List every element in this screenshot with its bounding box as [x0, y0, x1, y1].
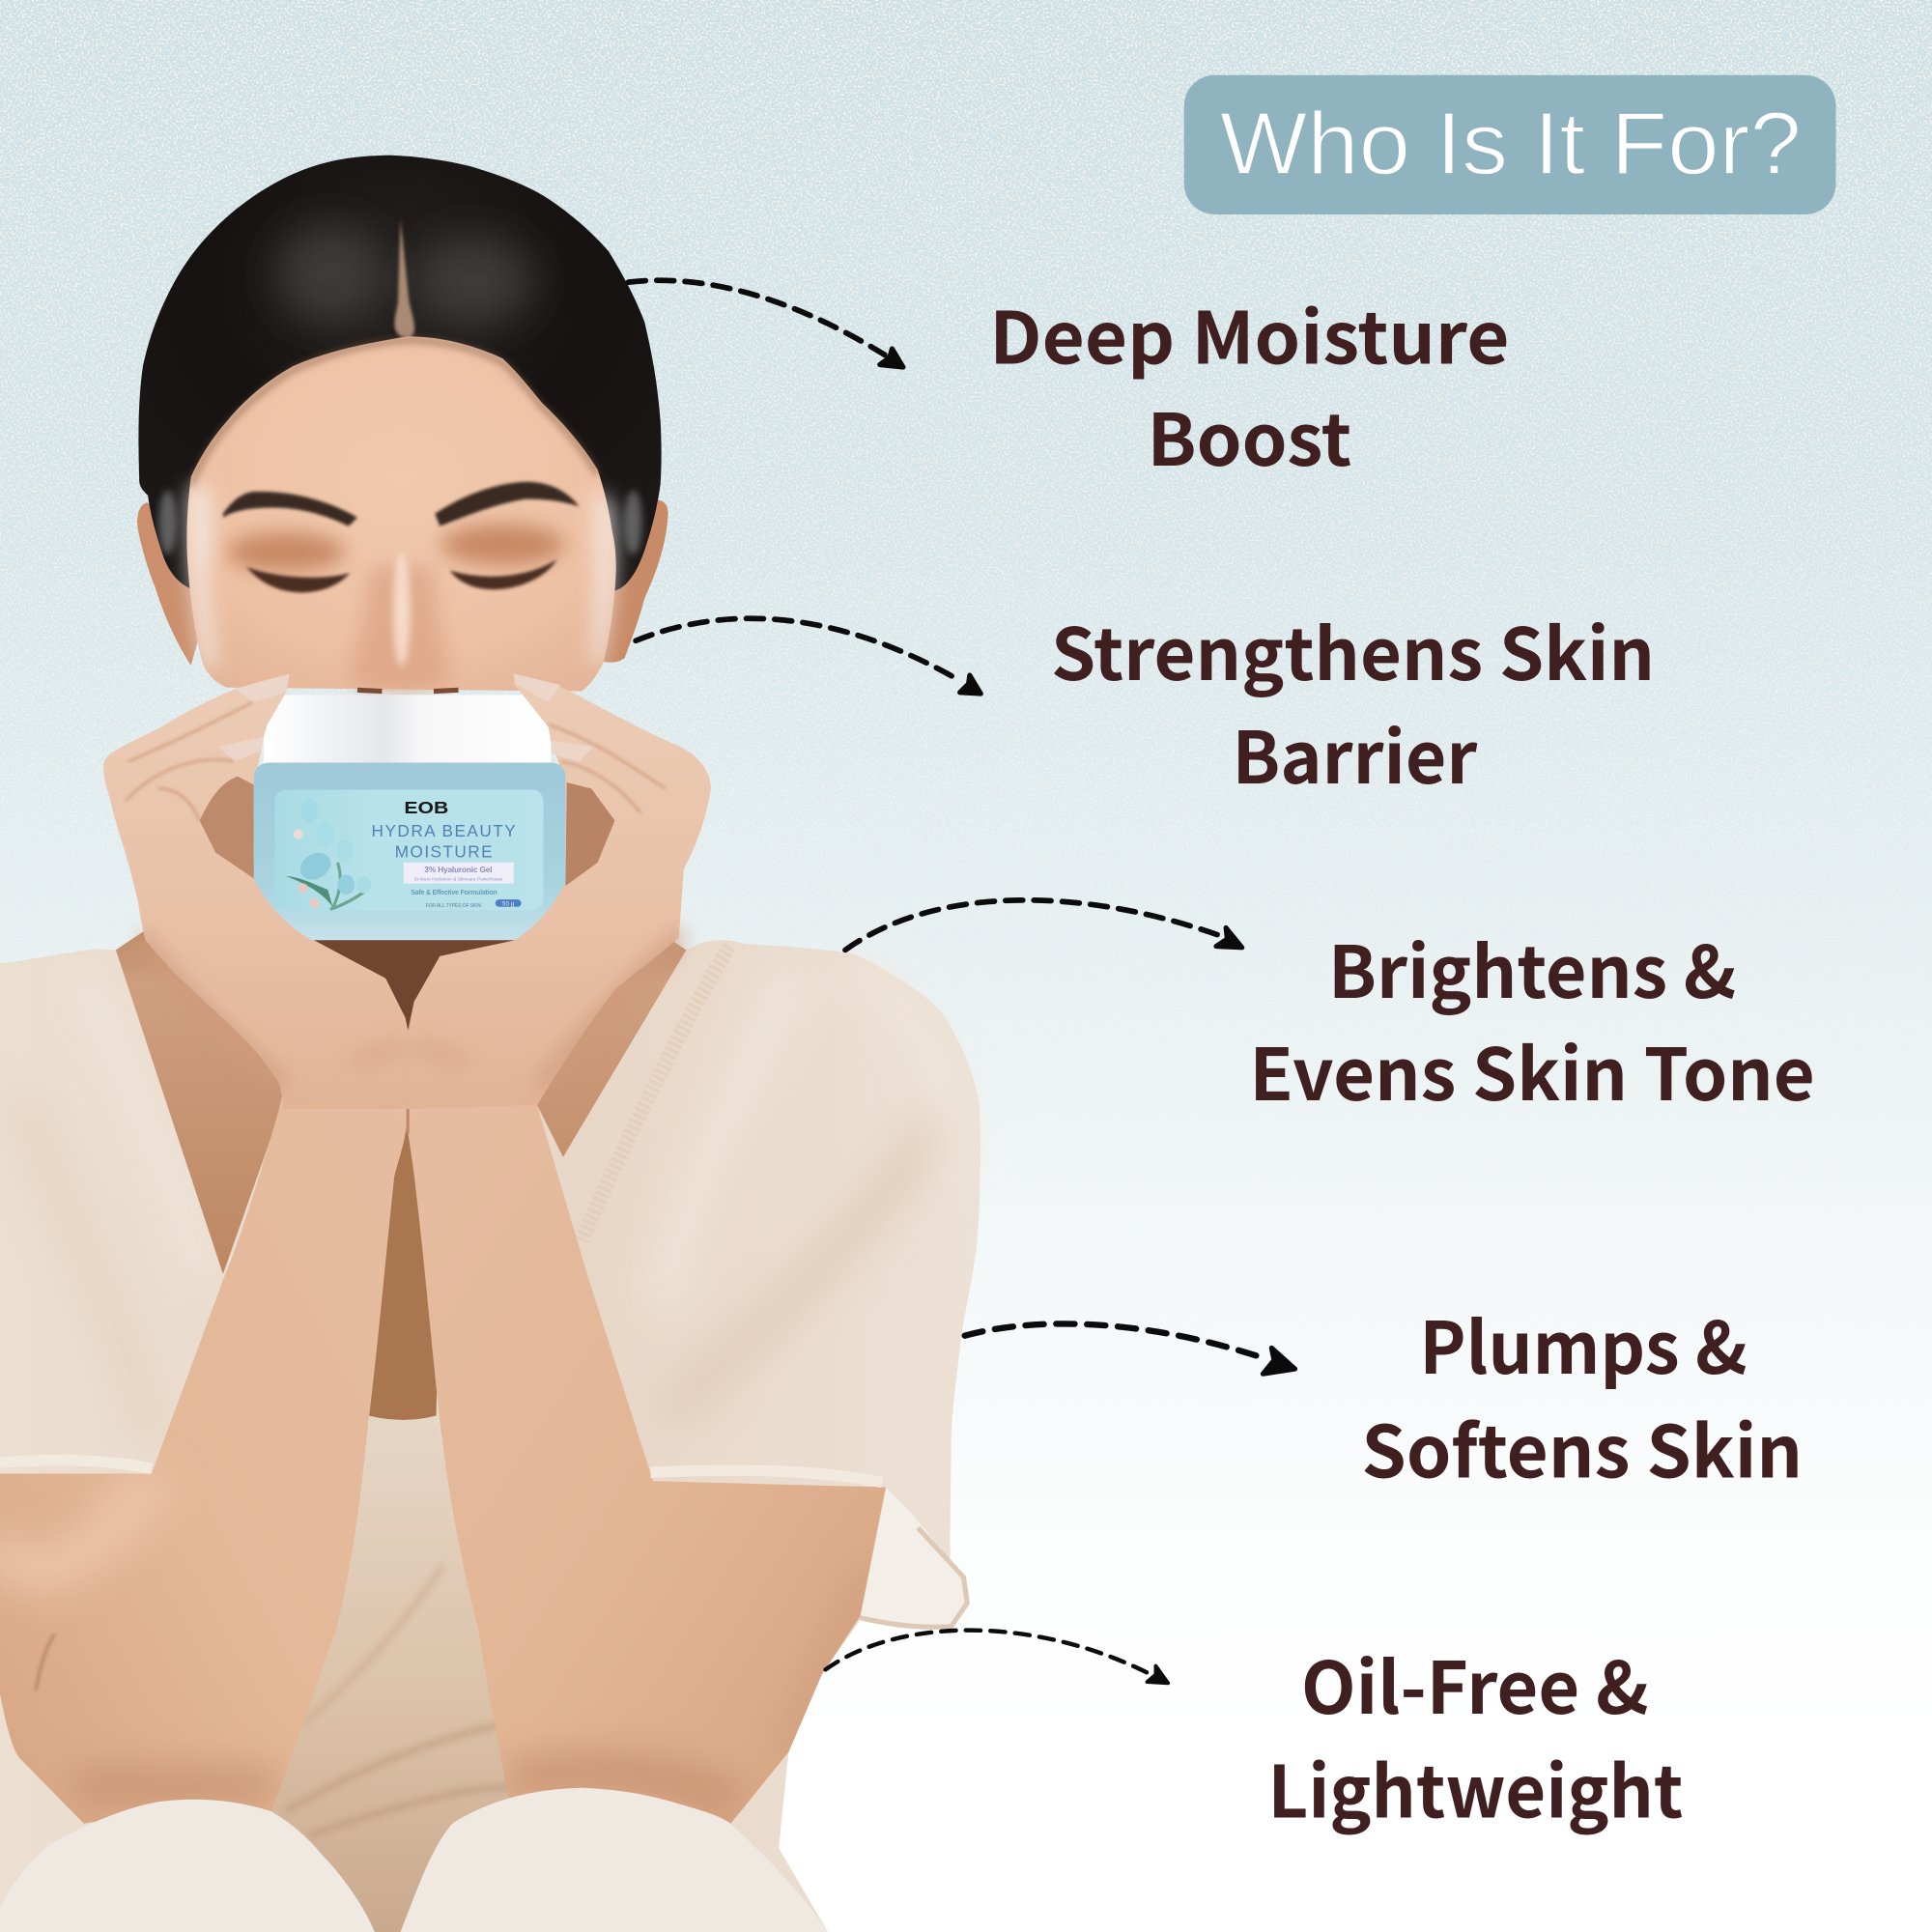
face	[186, 336, 616, 692]
benefit: even skin tone: Brightens &	[1328, 916, 1736, 1019]
nostril shadow	[357, 690, 458, 692]
sleeve folds	[25, 974, 955, 1430]
benefit: deep moisture	[989, 281, 1509, 487]
right sleeve hem	[650, 1470, 882, 1482]
title badge	[1184, 75, 1836, 214]
benefit: oil-free: Oil-Free &	[1301, 1632, 1649, 1735]
left eyebrow	[223, 492, 357, 526]
jar label	[274, 790, 543, 911]
cleavage shadow	[368, 1084, 443, 1420]
jar body	[254, 763, 565, 940]
person with product	[0, 156, 980, 1932]
benefit: plumps skin: Softens Skin	[1361, 1395, 1803, 1498]
skin type line: FOR ALL TYPES OF SKIN	[426, 903, 481, 909]
benefit: deep moisture: Boost	[1148, 384, 1351, 487]
arrow 4	[965, 1323, 1295, 1374]
benefit: plumps skin	[1361, 1292, 1803, 1498]
left sleeve hem	[0, 1461, 152, 1468]
benefit: oil-free	[1267, 1632, 1683, 1838]
product name: HYDRA BEAUTY	[372, 821, 516, 840]
claim box: 3% Hyaluronic Gel	[424, 865, 493, 874]
benefit: deep moisture: Deep Moisture	[989, 281, 1509, 384]
nose shading	[349, 567, 451, 693]
flutter hem	[860, 1528, 967, 1627]
face details	[223, 482, 579, 693]
benefit: skin barrier: Strengthens Skin	[1051, 598, 1655, 701]
benefit: skin barrier	[1051, 598, 1655, 805]
product name line 2: MOISTURE	[395, 842, 493, 862]
under-jar shadow	[312, 939, 515, 1030]
right hand	[409, 674, 711, 1109]
hair	[138, 156, 662, 591]
right eye	[450, 559, 557, 589]
right arm	[408, 1084, 886, 1830]
benefit: oil-free: Lightweight	[1267, 1735, 1683, 1838]
lower torso	[259, 1416, 567, 1932]
weight pill: 50 g	[502, 900, 515, 907]
title badge: Who Is It For?	[1220, 95, 1802, 193]
flower artwork	[286, 799, 371, 909]
hair sheen	[159, 224, 642, 554]
right eye shadow	[441, 524, 564, 565]
sleeve flutter	[860, 1488, 967, 1627]
wrist seam	[407, 1030, 409, 1133]
hand shading	[146, 938, 679, 1084]
fingernails	[219, 674, 594, 761]
left arm	[0, 1084, 408, 1824]
arrow 1	[629, 280, 903, 367]
claim box: 3x More Hydration & Skincare Powerhouse	[414, 876, 503, 881]
benefit: plumps skin: Plumps &	[1419, 1292, 1747, 1395]
nose highlight	[393, 554, 411, 667]
benefit: even skin tone	[1249, 916, 1815, 1122]
benefit: even skin tone: Evens Skin Tone	[1249, 1018, 1815, 1122]
right gap between fingers and jar	[565, 782, 614, 886]
benefit: skin barrier: Barrier	[1233, 701, 1478, 805]
trousers left knee	[0, 1800, 375, 1932]
weight pill	[496, 899, 522, 907]
elbow crease	[36, 1634, 54, 1690]
claim box	[404, 863, 514, 884]
face edge highlights	[187, 487, 615, 671]
arrow 2	[636, 618, 980, 694]
formulation line: Safe & Effective Formulation	[411, 890, 497, 896]
lace stripe	[582, 947, 729, 1240]
chest and neck	[116, 863, 686, 1274]
blouse	[0, 940, 980, 1932]
jar	[254, 763, 565, 940]
arrow 5	[826, 1631, 1168, 1683]
arrow 3	[845, 900, 1242, 950]
left ear	[137, 502, 212, 666]
left eye shadow	[227, 532, 345, 572]
left eye	[246, 567, 350, 592]
finger creases	[126, 702, 666, 820]
hair parting	[394, 219, 414, 340]
left gap between fingers and jar	[200, 777, 254, 878]
left hand	[103, 674, 409, 1109]
brand name: EOB	[404, 798, 448, 817]
right ear	[585, 499, 668, 663]
jar lid	[264, 695, 551, 766]
torso folds	[286, 1565, 518, 1836]
trousers right knee	[401, 1788, 828, 1932]
right eyebrow	[435, 482, 579, 526]
arm shading	[0, 1491, 868, 1799]
soft hairline	[191, 340, 598, 487]
